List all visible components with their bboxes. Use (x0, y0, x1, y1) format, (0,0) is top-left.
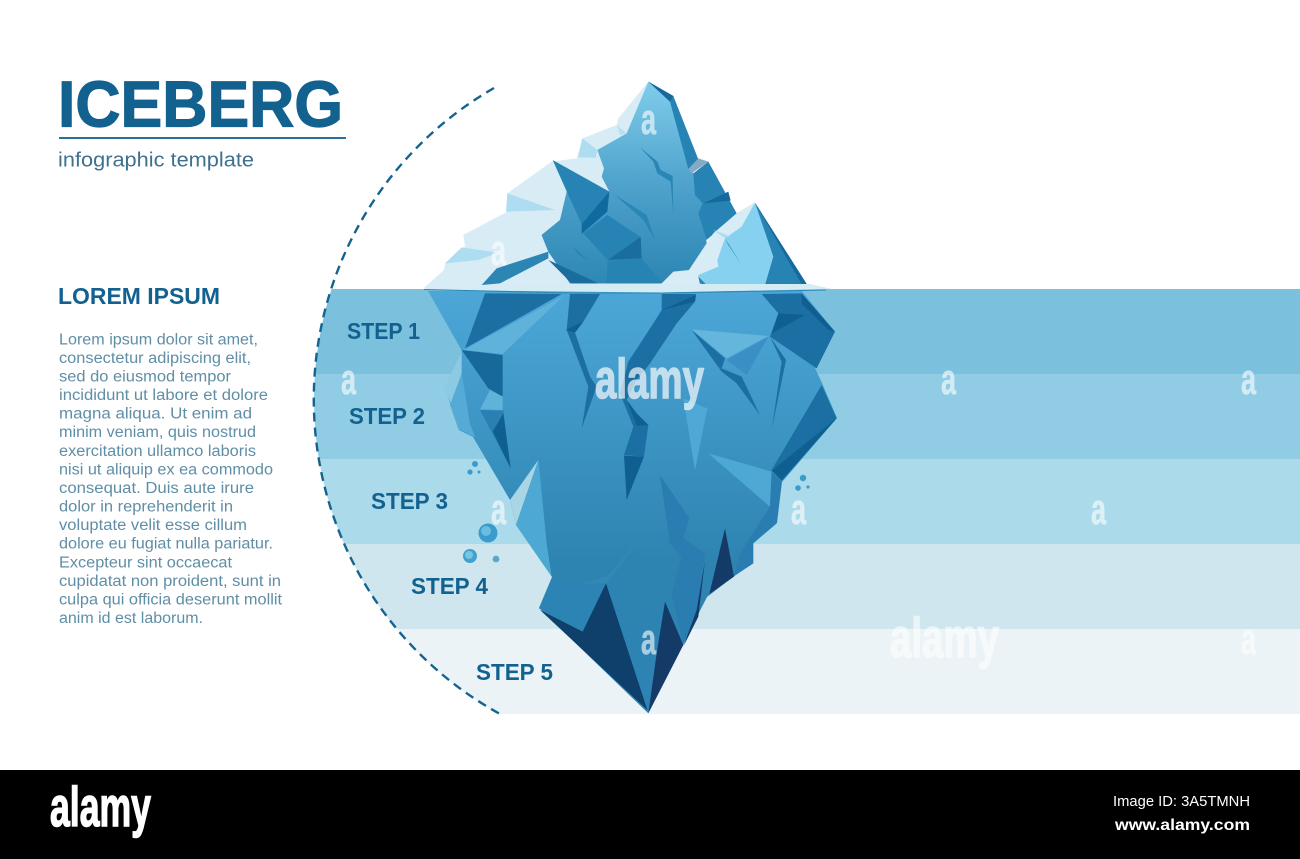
footer bar (0, 770, 1300, 859)
body text (59, 332, 283, 627)
body text: dolor in reprehenderit in (59, 498, 233, 516)
subtitle: infographic template (58, 150, 254, 172)
body text: dolore eu fugiat nulla pariatur. (59, 536, 273, 552)
body text: anim id est laborum. (59, 610, 203, 627)
body text: nisi ut aliquip ex ea commodo (59, 462, 273, 478)
watermarks: alamy (595, 347, 704, 410)
title rule (59, 137, 346, 139)
watermarks (341, 95, 1256, 669)
water depth bands (300, 289, 1300, 714)
watermarks: a (641, 615, 656, 664)
watermarks: a (1241, 615, 1256, 664)
watermarks: a (641, 95, 656, 144)
footer logo: alamy (50, 775, 151, 838)
iceberg above water (423, 82, 808, 288)
watermarks: alamy (890, 606, 999, 669)
body text: cupidatat non proident, sunt in (59, 573, 281, 590)
body text: exercitation ullamco laboris (59, 443, 256, 460)
body text: incididunt ut labore et dolore (59, 387, 268, 404)
heading: LOREM IPSUM (58, 283, 220, 309)
body text: consectetur adipiscing elit, (59, 350, 251, 367)
body text: Lorem ipsum dolor sit amet, (59, 332, 258, 348)
step labels (347, 318, 553, 685)
body text: culpa qui officia deserunt mollit (59, 592, 283, 608)
dashed arc (314, 88, 500, 714)
watermarks: a (1091, 485, 1106, 534)
watermarks: a (491, 485, 506, 534)
body text: minim veniam, quis nostrud (59, 424, 256, 441)
watermarks: a (341, 355, 356, 404)
image id: Image ID: 3A5TMNH (1113, 793, 1250, 810)
watermarks: a (941, 355, 956, 404)
title: ICEBERG (58, 68, 343, 140)
body text: consequat. Duis aute irure (59, 480, 254, 497)
watermarks: a (791, 485, 806, 534)
website: www.alamy.com (1114, 817, 1250, 834)
body text: Excepteur sint occaecat (59, 554, 233, 572)
waterline (423, 284, 832, 292)
step labels: STEP 3 (371, 488, 448, 514)
watermarks: a (491, 226, 506, 275)
iceberg below water (428, 291, 837, 713)
step labels: STEP 4 (411, 573, 488, 599)
step labels: STEP 2 (349, 403, 425, 429)
step labels: STEP 1 (347, 318, 420, 344)
body text: voluptate velit esse cillum (59, 517, 247, 534)
watermarks: a (1241, 355, 1256, 404)
step labels: STEP 5 (476, 659, 553, 685)
bubbles (463, 461, 810, 563)
body text: magna aliqua. Ut enim ad (59, 406, 252, 422)
body text: sed do eiusmod tempor (59, 368, 231, 386)
